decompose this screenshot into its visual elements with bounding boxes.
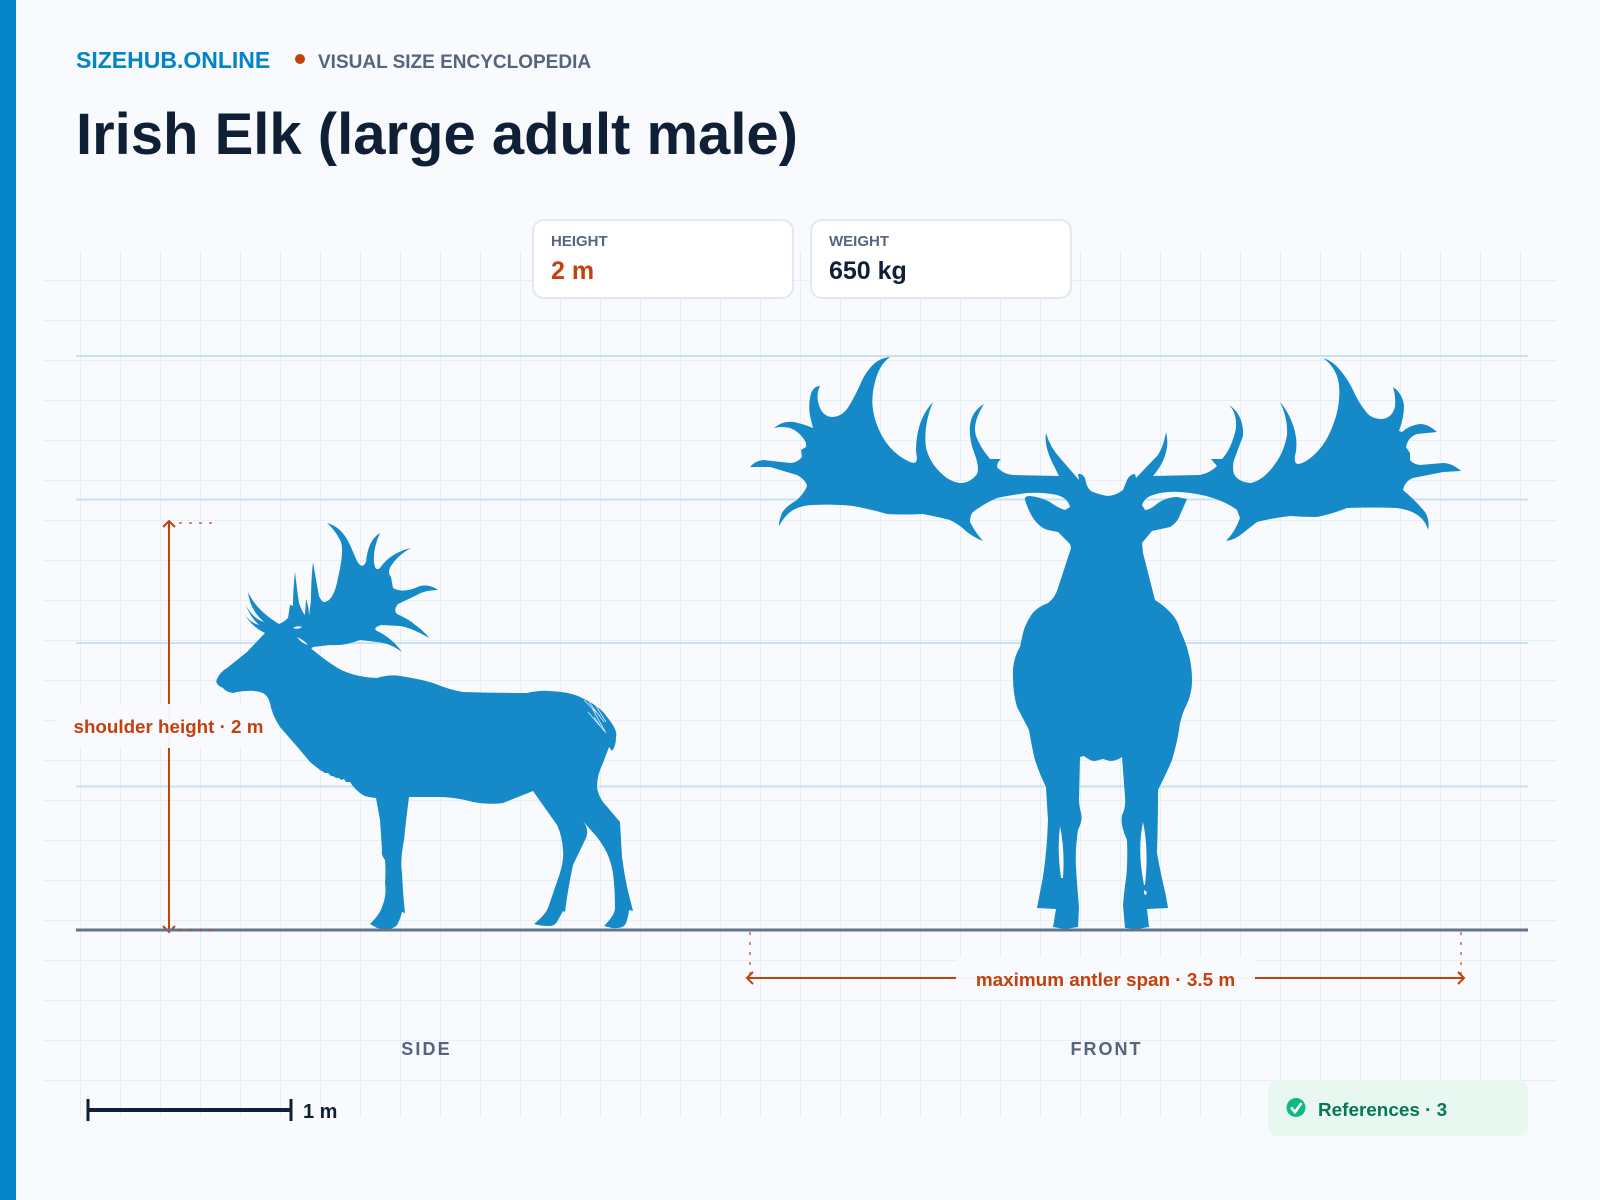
rump fur highlights xyxy=(584,700,606,733)
antler span dimension xyxy=(747,932,1464,1000)
tagline: VISUAL SIZE ENCYCLOPEDIA xyxy=(318,52,591,73)
header xyxy=(76,47,591,73)
label text: maximum antler span · 3.5 m xyxy=(976,970,1235,991)
horizontal height guides xyxy=(76,356,1528,786)
silhouette: front view elk xyxy=(750,357,1461,929)
vertical arrow xyxy=(163,521,175,932)
view label: front: FRONT xyxy=(1070,1039,1142,1059)
stat card: weight: WEIGHT xyxy=(829,233,889,250)
brand name: SIZEHUB.ONLINE xyxy=(76,47,270,73)
icon: check circle xyxy=(1286,1098,1306,1117)
stat card: height xyxy=(533,220,793,298)
stat card: weight xyxy=(811,220,1071,298)
shoulder height dimension xyxy=(58,521,280,932)
title: Irish Elk (large adult male) xyxy=(76,102,798,167)
stat card: weight: 650 kg xyxy=(829,257,907,285)
references badge xyxy=(1268,1080,1528,1136)
scale bar xyxy=(88,1099,337,1123)
separator dot xyxy=(295,54,305,64)
silhouette: side view elk xyxy=(216,523,633,929)
label text: shoulder height · 2 m xyxy=(74,716,263,737)
ground line xyxy=(76,928,1528,932)
stat card: height: 2 m xyxy=(551,257,594,285)
eye and antler-base highlights xyxy=(293,626,308,645)
label backing xyxy=(58,704,280,748)
label backing xyxy=(956,956,1255,1000)
scale bar: 1 m xyxy=(303,1101,337,1123)
dotted extension lines xyxy=(750,932,1461,976)
measurement grid xyxy=(44,252,1556,1116)
stat card: height: HEIGHT xyxy=(551,233,608,250)
dotted shoulder extension lines xyxy=(179,523,213,930)
horizontal arrow xyxy=(747,972,1464,984)
accent sidebar xyxy=(0,0,16,1200)
references badge: References · 3 xyxy=(1318,1100,1447,1121)
view label: side: SIDE xyxy=(401,1039,452,1059)
